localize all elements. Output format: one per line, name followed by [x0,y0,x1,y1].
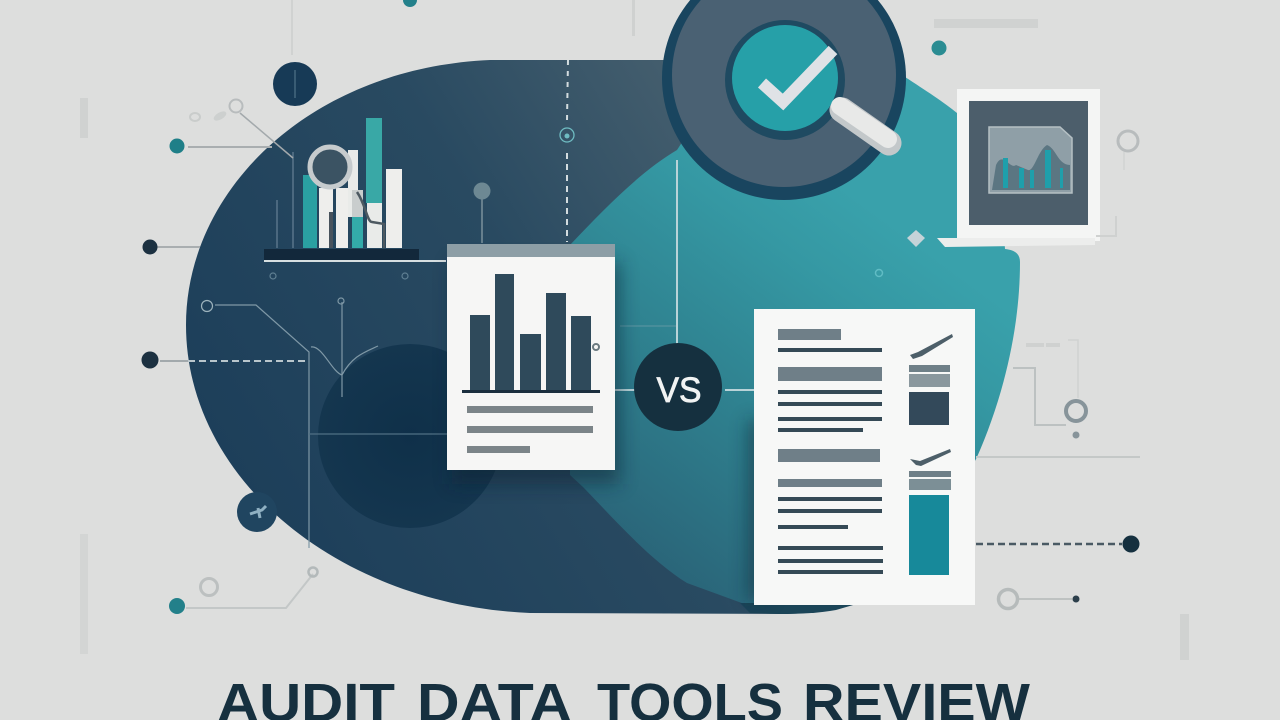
circuit lines on dark panel [202,273,448,548]
left bullet connectors [142,100,309,368]
panel: left bar chart document [447,244,615,470]
pin marker [474,182,490,243]
panel: teal backdrop [570,60,1020,614]
bar chart [462,274,600,393]
check marks [910,334,953,359]
text lines [778,348,883,574]
title [217,673,1030,720]
VS badge [634,343,722,431]
panel: laptop report card [937,89,1116,247]
connector lines around VS [615,160,754,390]
text lines [467,406,593,453]
dark orb top left [273,62,317,106]
side blocks [909,365,950,372]
right side circuit decorations [876,131,1140,608]
dotted vertical connector [560,60,574,242]
panel: dark rounded backdrop [186,60,840,614]
soft shadows under documents [452,262,768,600]
bottom left connector [169,568,318,614]
VS badge: VS [656,371,702,410]
background decorative marks [80,0,1189,660]
icon: magnifying glass with check [662,0,906,200]
headings [778,329,882,487]
dark inner circle [318,344,502,528]
mini area chart [989,127,1072,193]
chart icon on dark panel [264,118,446,262]
panel: right report document [754,309,975,605]
top teal dots [403,0,946,56]
dark badge lower left [237,492,277,532]
